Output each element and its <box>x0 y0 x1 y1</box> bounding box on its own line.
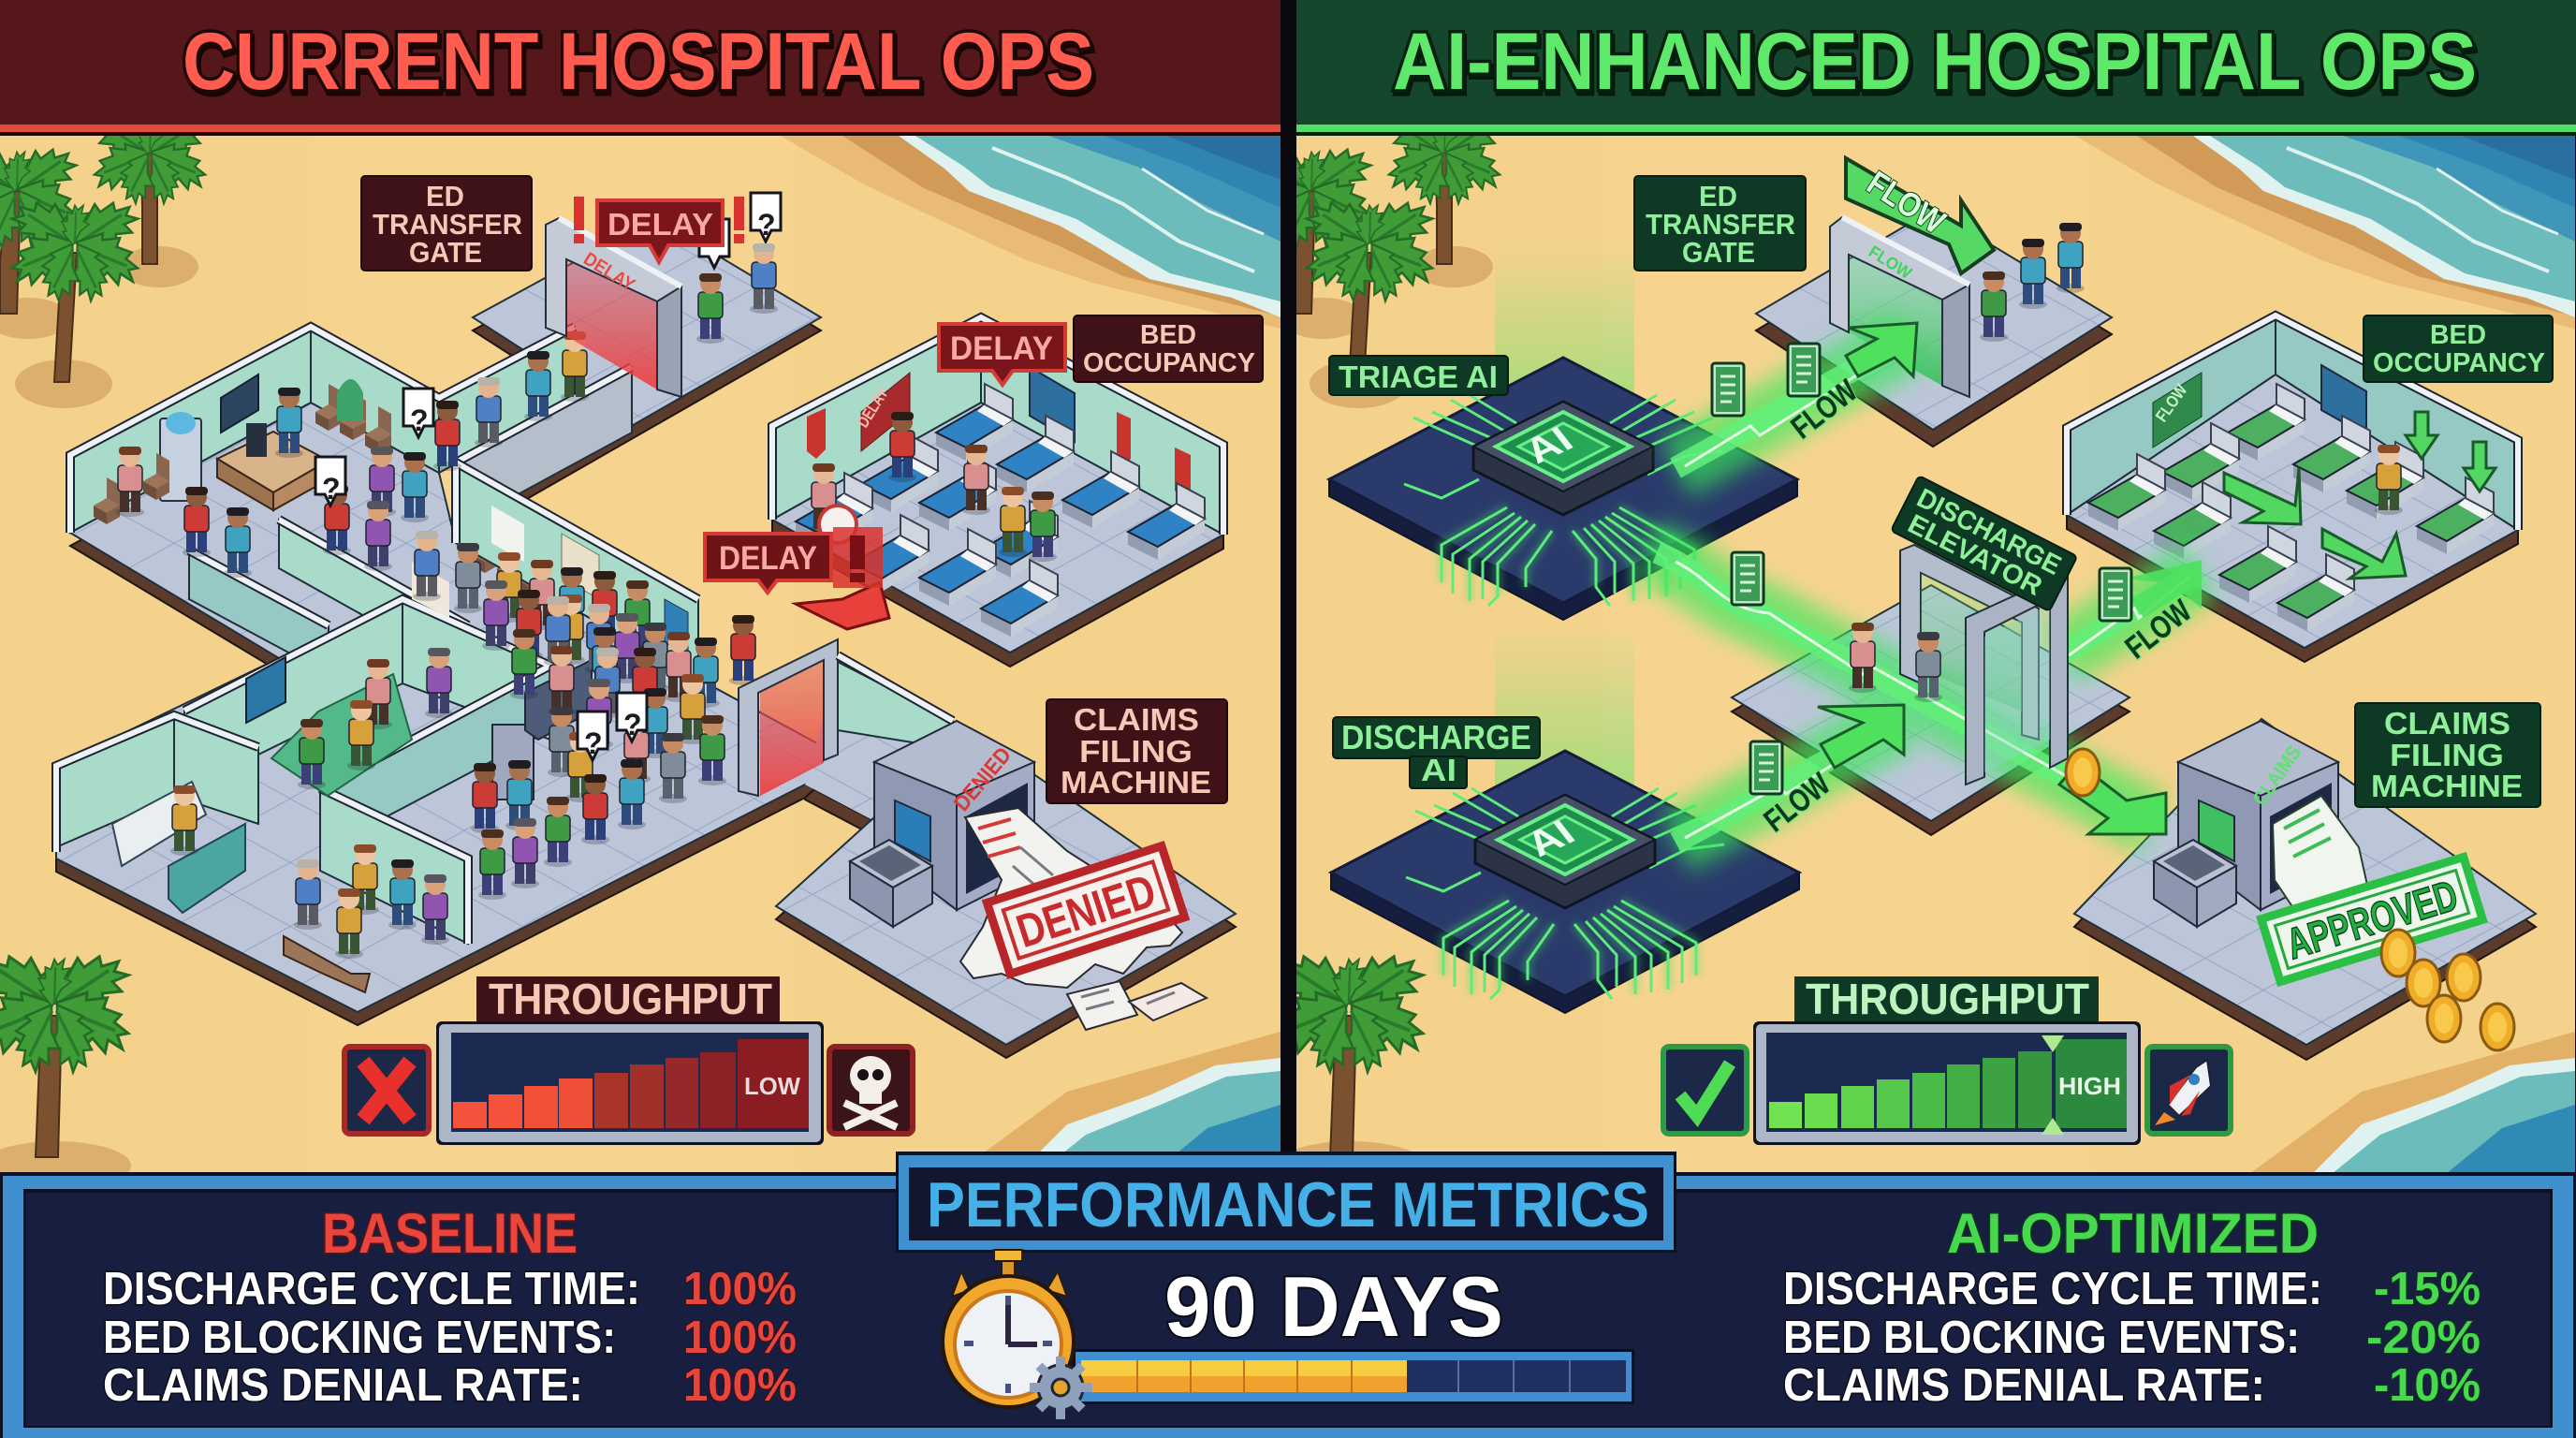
right header band <box>1296 0 2576 136</box>
right claims platform <box>2074 719 2536 1060</box>
baseline column: BASELINE <box>322 1202 578 1265</box>
left ward patients <box>810 412 1057 562</box>
big flow arrow at gate: FLOW <box>1861 163 1952 242</box>
label: claims filing machine (left): MACHINE <box>1061 765 1211 800</box>
ward flow arrow head <box>2125 560 2202 618</box>
coins <box>2066 749 2514 1050</box>
performance metrics title: PERFORMANCE METRICS <box>927 1169 1649 1240</box>
right gate people <box>1980 223 2085 342</box>
denied machine sign: DENIED <box>949 742 1017 816</box>
label: discharge elevator <box>1891 476 2077 611</box>
left question bubbles: ? <box>584 726 603 760</box>
label: discharge AI: AI <box>1421 753 1456 787</box>
delay tag at hall with exclamation <box>705 527 883 593</box>
right throughput gauge: HIGH <box>2058 1072 2121 1100</box>
left gate platform <box>456 218 821 500</box>
label: ED transfer gate (right): ED <box>1699 180 1737 213</box>
denied claim papers <box>960 808 1207 1030</box>
label: discharge elevator: ELEVATOR <box>1903 509 2047 602</box>
label: bed occupancy (right): BED <box>2430 320 2486 350</box>
AI-optimized column: -15% <box>2374 1264 2481 1314</box>
baseline column: 100% <box>683 1313 797 1363</box>
left ward beds <box>796 384 1205 637</box>
elevator people <box>1849 623 1942 702</box>
discharge chip AI text: AI <box>1518 813 1583 864</box>
left question bubbles: ? <box>623 708 642 741</box>
left throughput gauge <box>436 975 824 1145</box>
label: ED transfer gate (right): GATE <box>1682 236 1755 269</box>
left reception desk <box>160 412 329 510</box>
elevator flow arrow head <box>1818 705 1904 768</box>
90 days text: 90 DAYS <box>1164 1260 1503 1355</box>
label: claims filing machine (right): MACHINE <box>2371 769 2523 803</box>
right gate arch <box>1830 217 1969 397</box>
baseline column: DISCHARGE CYCLE TIME: <box>103 1264 640 1314</box>
flow text 1: FLOW <box>1785 373 1865 446</box>
right bed ward room: FLOW <box>2152 381 2191 425</box>
baseline column: 100% <box>683 1264 797 1314</box>
label: discharge AI: DISCHARGE <box>1341 718 1531 756</box>
label: bed occupancy (right) <box>2364 315 2553 382</box>
lower right flow arrow head <box>2059 763 2166 834</box>
baseline column: 100% <box>683 1360 797 1411</box>
right gate arch: FLOW <box>1866 242 1915 283</box>
label: bed occupancy (right): OCCUPANCY <box>2373 348 2545 378</box>
left question bubbles: ? <box>757 208 776 242</box>
documents <box>1712 344 2131 794</box>
AI-optimized column: DISCHARGE CYCLE TIME: <box>1783 1264 2322 1314</box>
right panel beach background <box>1245 105 2575 1190</box>
light column: discharge AI <box>1495 623 1634 838</box>
gate flow arrow head <box>1846 323 1917 376</box>
label: claims filing machine (right) <box>2355 703 2540 807</box>
approved stamp <box>2261 857 2482 982</box>
label: ED transfer gate (right): TRANSFER <box>1646 208 1795 241</box>
delay tag at gate: DELAY <box>607 207 713 242</box>
left panel beach background <box>0 105 1281 1190</box>
flow text 3: FLOW <box>1758 766 1837 839</box>
right elevator platform <box>1732 585 2130 835</box>
left corridor wall to gate <box>456 367 632 528</box>
performance metrics title <box>896 1152 1676 1253</box>
right claims machine <box>2154 721 2338 927</box>
label: ED transfer gate (left): TRANSFER <box>373 208 522 241</box>
baseline column <box>103 1202 797 1411</box>
elevator frames <box>1900 545 2068 785</box>
icon: skull <box>829 1047 913 1134</box>
icon: green check <box>1663 1047 1747 1134</box>
AI-optimized column: CLAIMS DENIAL RATE: <box>1783 1360 2265 1411</box>
right throughput gauge: THROUGHPUT <box>1806 975 2089 1023</box>
green flow beams <box>1647 339 2200 843</box>
left ED transfer gate arch <box>546 218 681 397</box>
right throughput gauge <box>1753 975 2141 1145</box>
label: claims filing machine (right): FILING <box>2390 738 2504 772</box>
left crowd of patients <box>116 331 757 959</box>
label: ED transfer gate (left): GATE <box>409 236 482 269</box>
right bed ward room <box>2067 315 2518 662</box>
label: claims filing machine (left): FILING <box>1079 734 1193 769</box>
left ED transfer gate arch: DELAY <box>579 249 638 296</box>
triage chip AI text: AI <box>1516 419 1581 471</box>
flow text 2: FLOW <box>2119 593 2199 666</box>
delay tag at ward: DELAY <box>950 330 1053 367</box>
icon: rocket <box>2147 1047 2231 1134</box>
label: claims filing machine (left): CLAIMS <box>1074 702 1199 737</box>
machine claims sign: CLAIMS <box>2248 741 2305 810</box>
delay tag at ward <box>939 324 1065 385</box>
denied stamp <box>987 846 1185 974</box>
delay tag at gate <box>574 197 744 262</box>
icon: red X <box>344 1047 429 1134</box>
left throughput gauge: THROUGHPUT <box>489 975 772 1023</box>
baseline column: BED BLOCKING EVENTS: <box>103 1313 616 1363</box>
label: bed occupancy (left) <box>1074 315 1263 382</box>
left lower gate <box>739 639 953 796</box>
triage AI chip platform <box>1329 358 1797 620</box>
label: discharge elevator: DISCHARGE <box>1912 483 2066 581</box>
left question bubbles: ? <box>322 472 341 506</box>
AI-optimized column: BED BLOCKING EVENTS: <box>1783 1313 2300 1363</box>
left question bubbles: ? <box>410 404 429 437</box>
label: bed occupancy (left): BED <box>1140 320 1196 350</box>
left title: CURRENT HOSPITAL OPS <box>183 17 1094 107</box>
left question bubbles <box>315 193 781 760</box>
label: bed occupancy (left): OCCUPANCY <box>1083 348 1255 378</box>
center divider <box>1281 0 1296 1180</box>
left header band <box>0 0 1281 136</box>
label: ED transfer gate (right) <box>1634 176 1806 271</box>
label: triage AI: TRIAGE AI <box>1339 360 1498 394</box>
approved papers <box>2273 796 2368 908</box>
icon: stopwatch with gear <box>943 1250 1092 1419</box>
AI-optimized column: AI-OPTIMIZED <box>1947 1202 2319 1265</box>
label: ED transfer gate (left) <box>361 176 532 271</box>
label: discharge AI <box>1333 717 1540 788</box>
left claims machine <box>850 721 1034 927</box>
left gate people <box>696 243 778 344</box>
approved stamp: APPROVED <box>2281 871 2463 968</box>
left interior partitions <box>189 520 468 674</box>
AI-optimized column: -20% <box>2366 1313 2481 1363</box>
AI-optimized column <box>1783 1202 2481 1411</box>
left hospital walls back <box>70 327 575 534</box>
metrics panel <box>0 1172 2576 1438</box>
delay tag at hall with exclamation: DELAY <box>719 540 817 577</box>
left main hospital floor <box>56 403 1236 1058</box>
baseline column: CLAIMS DENIAL RATE: <box>103 1360 583 1411</box>
90 day progress bar <box>1072 1349 1634 1404</box>
right person in ward <box>2375 445 2403 515</box>
left bed ward room: DELAY <box>853 385 892 431</box>
label: claims filing machine (right): CLAIMS <box>2384 706 2510 741</box>
left bed ward room <box>772 317 1223 667</box>
left lower wing walls <box>56 562 550 944</box>
AI-optimized column: -10% <box>2374 1360 2481 1411</box>
left exam bed and desks <box>112 660 592 992</box>
right ward beds <box>2088 384 2494 631</box>
big flow arrow at gate <box>1846 158 1994 273</box>
light column: triage AI <box>1495 243 1634 454</box>
discharge AI chip platform <box>1331 751 1799 1013</box>
label: claims filing machine (left) <box>1046 699 1227 803</box>
denied stamp: DENIED <box>1010 864 1162 958</box>
right ward flow arrows <box>2224 412 2496 579</box>
left waiting chairs <box>94 379 575 615</box>
label: ED transfer gate (left): ED <box>426 180 464 213</box>
right gate platform <box>1756 210 2112 447</box>
left main hall wall <box>456 462 698 679</box>
left red delay arrow <box>796 582 889 629</box>
right title: AI-ENHANCED HOSPITAL OPS <box>1393 17 2477 107</box>
left throughput gauge: LOW <box>744 1072 800 1100</box>
